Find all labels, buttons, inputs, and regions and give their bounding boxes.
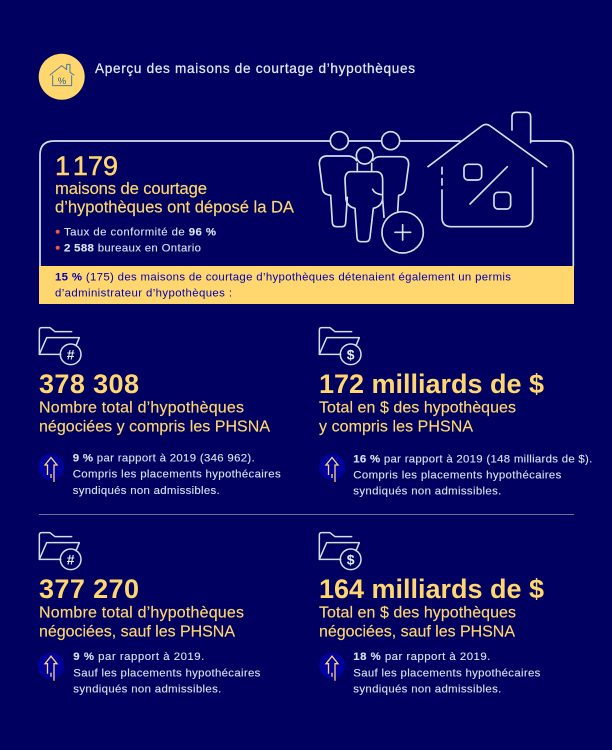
stat: total mortgages excluding NQSM [38,533,261,696]
icon: up arrow [38,653,64,681]
description: négociées y compris les PHSNA [39,419,270,436]
illustration: house with percent [428,112,547,227]
icon: house with percent badge [39,54,85,100]
illustration: people with plus sign [319,132,423,253]
figure: 377 270 [39,574,139,604]
title: Aperçu des maisons de courtage d’hypothèques [95,61,415,76]
change note [73,453,281,497]
icon: up arrow [319,454,345,482]
description: négociées, sauf les PHSNA [319,624,515,641]
stat: total mortgages including NQSM [38,328,281,497]
icon: up arrow [38,454,64,482]
callout band: d’administrateur d’hypothèques : [55,288,232,300]
headline figure: 1 179 [55,151,118,181]
icon: folder with dollar sign [319,533,361,570]
change note: Sauf les placements hypothécaires [353,667,541,679]
change note: 9 % par rapport à 2019 (346 962). [73,453,255,465]
change note: 9 % par rapport à 2019. [73,651,204,663]
description: y compris les PHSNA [319,419,473,436]
change note: 16 % par rapport à 2019 (148 milliards de $). [353,454,592,466]
change note: Compris les placements hypothécaires [353,469,562,481]
description [319,400,516,436]
change note: Compris les placements hypothécaires [73,469,281,481]
change note: syndiqués non admissibles. [73,684,221,696]
change note [353,454,592,497]
change note [73,651,261,696]
change note: syndiqués non admissibles. [73,485,220,497]
icon: folder with number sign: # [67,346,75,362]
icon: folder with dollar sign: $ [347,346,355,362]
icon: folder with number sign [39,328,81,365]
bullet list: 2 588 bureaux en Ontario [64,243,201,255]
change note [353,651,541,696]
icon: folder with dollar sign: $ [347,552,355,568]
icon: folder with number sign: # [67,552,75,568]
icon: up arrow [319,653,345,681]
figure: 378 308 [39,369,139,399]
stat: total dollar value excluding NQSM [319,533,544,696]
description: Total en $ des hypothèques [319,605,516,622]
change note: syndiqués non admissibles. [353,684,501,696]
change note: Sauf les placements hypothécaires [73,667,261,679]
bullet list: Taux de conformité de 96 % [64,227,216,239]
bullet list [56,227,216,255]
headline label [55,179,295,217]
description [319,605,516,641]
panel: summary of brokerages [39,112,574,304]
figure: 164 milliards de $ [319,574,544,604]
change note: syndiqués non admissibles. [353,485,501,497]
change note: 18 % par rapport à 2019. [353,651,490,663]
description: Nombre total d’hypothèques [39,400,244,417]
icon: folder with number sign [39,533,81,570]
callout band: 15 % (175) des maisons de courtage d’hypothèques détenaient également un permis [55,272,511,284]
headline label: d’hypothèques ont déposé la DA [55,198,295,217]
panel outline [40,141,573,266]
icon: folder with dollar sign [319,328,361,365]
description: Nombre total d’hypothèques [39,605,244,622]
icon: house with percent badge: % [58,76,67,87]
stat: total dollar value including NQSM [319,328,592,497]
description: Total en $ des hypothèques [319,400,516,417]
headline label: maisons de courtage [55,179,207,198]
description [39,400,270,436]
figure: 172 milliards de $ [319,369,544,399]
callout band [39,266,574,304]
description: négociées, sauf les PHSNA [39,624,235,641]
description [39,605,244,641]
